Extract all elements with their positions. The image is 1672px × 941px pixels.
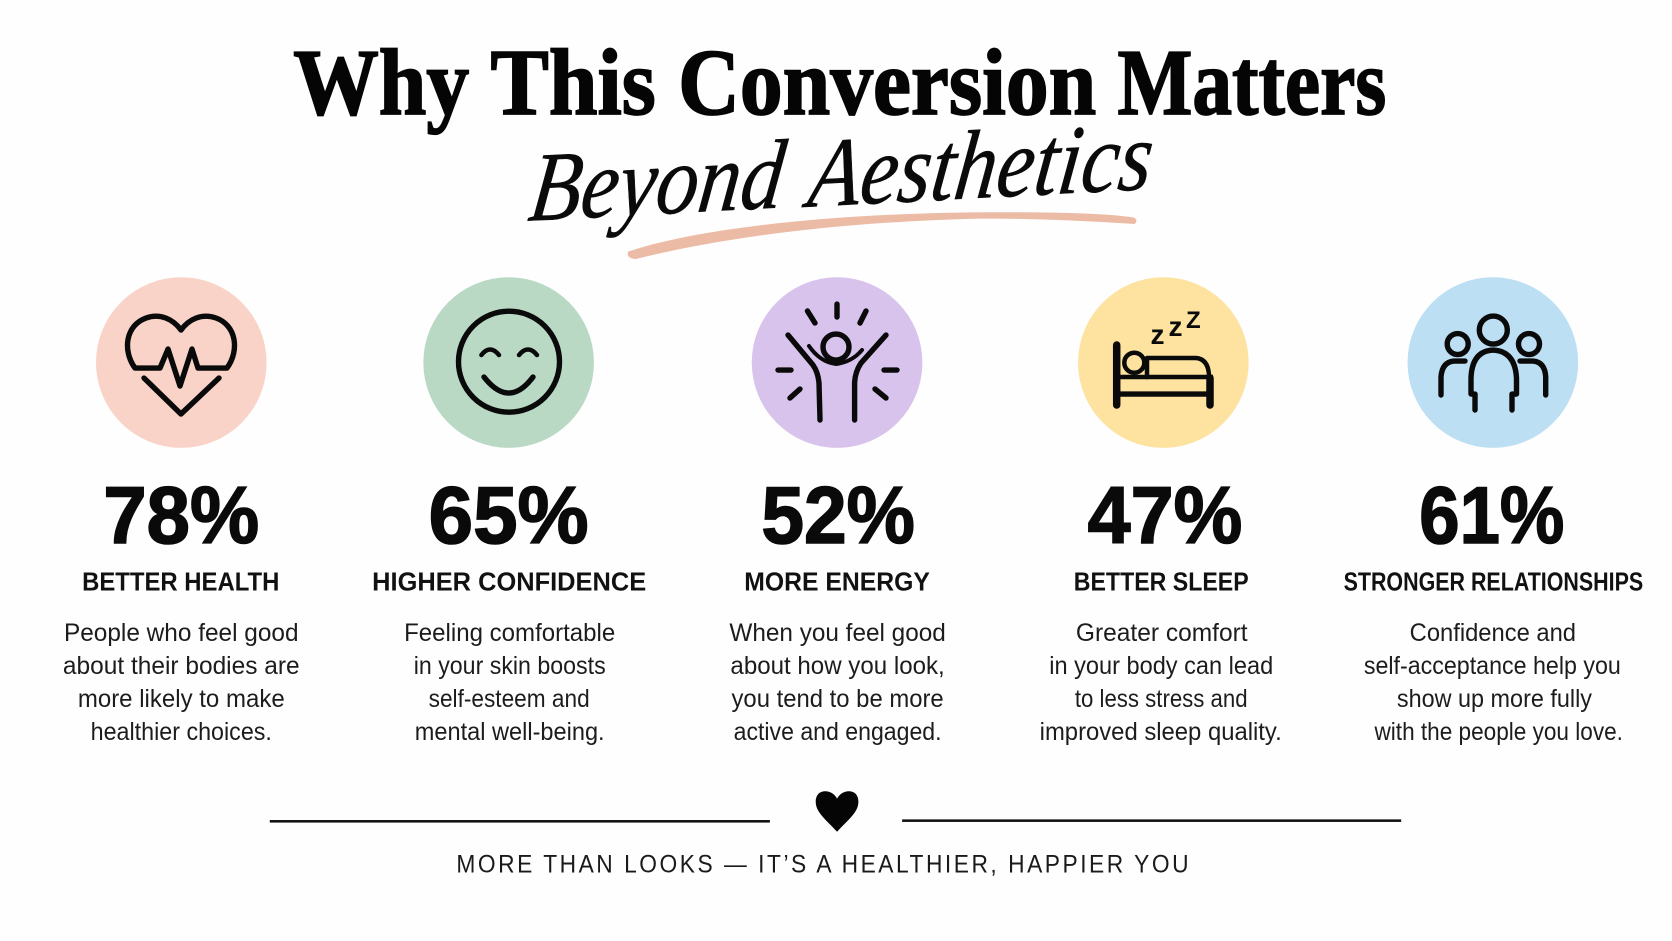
icon: person sleeping in bed (1078, 277, 1249, 448)
description (729, 620, 946, 746)
description: more likely to make (78, 686, 285, 713)
description: to less stress and (1075, 686, 1248, 713)
subtitle: script: Aesthetics (798, 102, 1160, 229)
description (1040, 620, 1282, 746)
stat: 78%: 78% (103, 471, 259, 561)
description: Greater comfort (1076, 620, 1248, 647)
description (404, 620, 615, 746)
footer divider (270, 791, 1401, 832)
stat: 61%: 61% (1419, 471, 1564, 561)
label: better sleep: BETTER SLEEP (1074, 567, 1249, 597)
stat: 52%: 52% (761, 471, 915, 561)
description (1364, 620, 1623, 746)
icon: person sleeping in bed: Z (1186, 307, 1201, 334)
description: show up more fully (1397, 686, 1593, 713)
subtitle underline stroke (628, 212, 1136, 259)
stat: 47%: 47% (1088, 471, 1242, 561)
title: Why (293, 31, 469, 135)
description: in your skin boosts (414, 653, 606, 680)
description: Feeling comfortable (404, 620, 615, 647)
description: in your body can lead (1049, 653, 1273, 680)
description (63, 620, 300, 746)
description: about their bodies are (63, 653, 300, 680)
panel: better sleep (1040, 277, 1282, 746)
label: better health: BETTER HEALTH (82, 567, 279, 597)
panel: stronger relationships (1344, 277, 1643, 746)
panel: more energy (729, 277, 946, 746)
icon: heart with pulse (96, 277, 267, 448)
footer tagline: MORE THAN LOOKS — IT’S A HEALTHIER, HAPPIER YOU (456, 850, 1191, 878)
title: This (491, 31, 656, 135)
description: Confidence and (1410, 620, 1576, 647)
icon: person sleeping in bed: z (1169, 311, 1183, 342)
stat: 65%: 65% (429, 471, 589, 561)
description: active and engaged. (734, 719, 942, 746)
description: with the people you love. (1374, 719, 1623, 746)
subtitle: script: Beyond (524, 120, 791, 243)
description: healthier choices. (91, 719, 272, 746)
description: self-esteem and (429, 686, 590, 713)
description: When you feel good (729, 620, 946, 647)
label: more energy: MORE ENERGY (744, 567, 930, 597)
title: Conversion (678, 31, 1096, 135)
description: self-acceptance help you (1364, 653, 1621, 680)
icon: three people (1408, 277, 1578, 448)
description: you tend to be more (732, 686, 944, 713)
title: Matters (1118, 31, 1386, 135)
description: improved sleep quality. (1040, 719, 1282, 746)
subtitle: script (524, 102, 1160, 243)
label: higher confidence: HIGHER CONFIDENCE (372, 567, 646, 597)
description: about how you look, (730, 653, 945, 680)
description: People who feel good (64, 620, 299, 647)
panel: higher confidence (372, 277, 646, 746)
description: mental well-being. (415, 719, 605, 746)
panel: better health (63, 277, 300, 746)
icon: heart (816, 791, 858, 832)
icon: person with raised arms (752, 277, 922, 448)
title (293, 31, 1386, 135)
icon: person sleeping in bed: z (1151, 319, 1165, 350)
icon: smiley face (423, 277, 594, 448)
